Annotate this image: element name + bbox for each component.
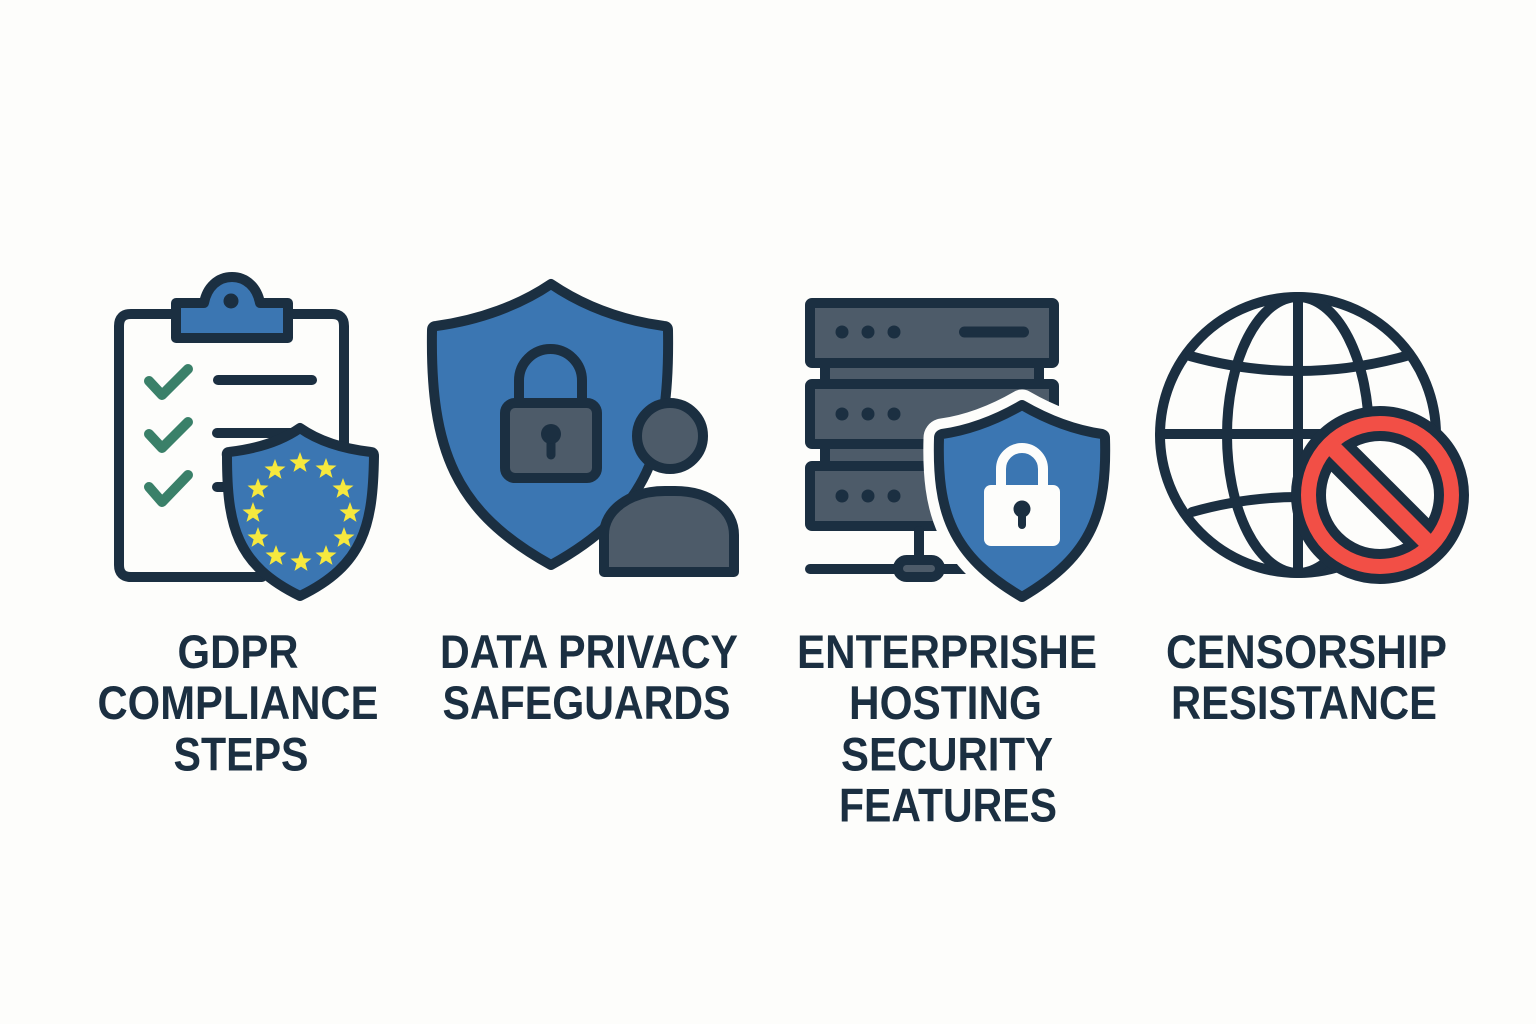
- label: GDPR Compliance Steps: STEPS: [174, 728, 308, 782]
- sign disc: [1296, 411, 1464, 579]
- checkmarks: [149, 369, 188, 502]
- shield: [939, 405, 1105, 597]
- icon: server rack with shield: [810, 303, 1105, 597]
- label: Enterprishe Hosting Security Features: SECURITY: [841, 728, 1053, 782]
- label: Enterprishe Hosting Security Features: HOSTING: [849, 677, 1042, 730]
- curved meridians: [1227, 297, 1369, 573]
- server slot: [964, 326, 1024, 338]
- keyhole: [546, 436, 556, 455]
- server lights: [836, 326, 900, 502]
- globe outline: [1160, 297, 1436, 573]
- label: GDPR Compliance Steps: COMPLIANCE: [98, 677, 378, 730]
- label: Enterprishe Hosting Security Features: ENTERPRISHE: [797, 626, 1097, 679]
- large shield: [432, 284, 668, 565]
- server unit bottom: [810, 466, 1054, 526]
- EU shield: [227, 428, 374, 596]
- server connectors: [825, 358, 1039, 390]
- network node: [898, 560, 940, 577]
- label: Censorship Resistance: [1166, 626, 1447, 730]
- white padlock keyhole: [1018, 512, 1026, 525]
- clipboard clip: [176, 277, 288, 338]
- label: Censorship Resistance: CENSORSHIP: [1166, 626, 1447, 679]
- label: GDPR Compliance Steps: GDPR: [178, 626, 298, 679]
- white padlock shackle: [1001, 448, 1043, 490]
- prohibition sign: [1296, 411, 1464, 579]
- network stand: [810, 531, 985, 569]
- meridians: [1293, 297, 1303, 573]
- label: Data Privacy Safeguards: SAFEGUARDS: [442, 677, 730, 730]
- label: Data Privacy Safeguards: [440, 626, 738, 730]
- shield cut-out outline: [939, 405, 1105, 597]
- padlock shackle: [519, 349, 582, 403]
- person body: [604, 491, 734, 572]
- person head: [637, 403, 703, 469]
- icon: globe with prohibition sign: [1160, 297, 1464, 579]
- label: Enterprishe Hosting Security Features: FEATURES: [839, 780, 1057, 832]
- server unit middle: [810, 384, 1054, 444]
- sign opening: [1321, 436, 1439, 554]
- label: Data Privacy Safeguards: DATA PRIVACY: [440, 626, 738, 679]
- EU stars: [242, 452, 360, 571]
- icon: clipboard with EU shield: [119, 277, 374, 596]
- clipboard board: [119, 314, 344, 577]
- label: Censorship Resistance: RESISTANCE: [1171, 677, 1437, 730]
- sign bar outline: [1338, 453, 1422, 537]
- white padlock body: [984, 485, 1060, 546]
- server unit top: [810, 303, 1054, 363]
- icon: shield with padlock and person: [432, 284, 734, 572]
- parallels: [1160, 356, 1436, 512]
- checklist lines: [217, 380, 312, 487]
- sign bar: [1329, 444, 1431, 546]
- clip hole: [225, 295, 237, 307]
- label: GDPR Compliance Steps: [98, 626, 378, 782]
- label: Enterprishe Hosting Security Features: [797, 626, 1097, 832]
- padlock body: [505, 403, 597, 478]
